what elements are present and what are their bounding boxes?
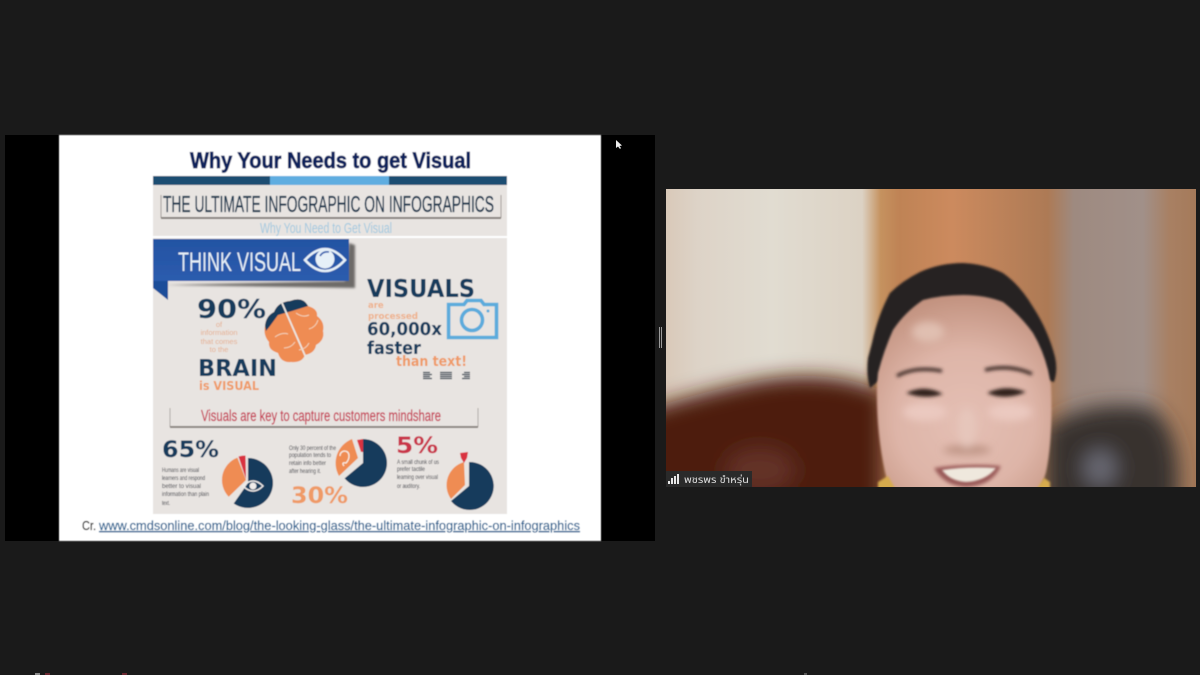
icon: text lines [423, 372, 470, 378]
source credit: www.cmdsonline.com/blog/the-looking-glass/the-ultimate-infographic-on-infographics [98, 518, 580, 533]
cropped toolbar specks at bottom edge [35, 673, 807, 675]
65 percent description [162, 467, 209, 507]
icon: ear on pie [340, 451, 349, 466]
information caption: of [216, 320, 223, 329]
panel resize handle [659, 327, 662, 348]
think visual ribbon [153, 239, 355, 300]
65 percent description: Humans are visual [162, 467, 199, 474]
white divider [153, 236, 507, 238]
think visual ribbon: THINK VISUAL [178, 247, 301, 277]
information caption: information [200, 328, 238, 337]
stat: visuals 60,000x [367, 274, 496, 378]
65 percent description: learners and respond [162, 475, 205, 482]
mouse cursor [616, 140, 622, 149]
icon: signal bars [668, 474, 679, 484]
pie chart: 5 percent [447, 452, 494, 510]
source credit: Cr. [82, 518, 96, 533]
section banner: customers mindshare [170, 408, 478, 428]
30 percent description: retain info better [289, 460, 327, 467]
90 percent figure: 90% [197, 295, 266, 325]
30 percent description [289, 445, 336, 475]
65 percent description: text. [162, 500, 170, 507]
are processed [368, 301, 418, 322]
60,000x figure: 60,000x [367, 319, 442, 340]
icon: camera [449, 300, 496, 338]
eyes [906, 388, 1026, 397]
blurred furniture [666, 359, 1192, 487]
are processed: processed [368, 312, 418, 322]
stat: 90 percent brain [197, 295, 323, 393]
tricolour header bar [153, 176, 507, 185]
5 percent description: A small chunk of us [397, 459, 440, 466]
infographic heading banner: THE ULTIMATE INFOGRAPHIC ON INFOGRAPHICS [163, 191, 494, 217]
participant name: พชรพร ขำหรุ่น [684, 473, 749, 486]
brain label: BRAIN [198, 356, 277, 382]
30 percent description: Only 30 percent of the [289, 445, 336, 452]
face shading [903, 322, 1032, 455]
65 percent description: information than plain [162, 491, 209, 498]
30 percent figure: 30% [291, 484, 348, 509]
section banner: customers mindshare: Visuals are key to capture customers mindshare [201, 408, 441, 425]
5 percent description: learning over visual [397, 474, 438, 481]
infographic background [153, 176, 507, 514]
is visual label: is VISUAL [199, 379, 259, 393]
stat: 30 percent [289, 439, 387, 509]
5 percent description: or auditory. [397, 483, 420, 490]
are processed: are [368, 301, 384, 311]
person [867, 263, 1056, 492]
30 percent description: population tends to [289, 452, 331, 459]
pie chart: 65 percent [222, 455, 273, 508]
infographic panel [153, 176, 507, 514]
slide [59, 135, 601, 541]
65 percent description: better to visual [162, 483, 202, 490]
hair [867, 263, 1056, 388]
blurred room background [666, 189, 1196, 487]
collar [876, 476, 1052, 487]
slide white background [59, 135, 601, 541]
infographic subtitle: Why You Need to Get Visual [260, 220, 392, 237]
5 percent description [397, 459, 440, 490]
5 percent figure: 5% [396, 434, 438, 459]
5 percent description: prefer tactile [397, 466, 425, 473]
video panel: participant [666, 189, 1196, 487]
shared screen: black slide frame [5, 135, 655, 541]
information caption [200, 320, 238, 354]
30 percent description: after hearing it. [289, 468, 321, 475]
mouth [934, 465, 1001, 487]
stat: 5 percent [396, 434, 494, 510]
name tag [666, 471, 752, 487]
than text: than text! [396, 354, 467, 370]
icon: eye on pie [243, 481, 263, 491]
65 percent figure: 65% [162, 438, 219, 463]
visuals heading: VISUALS [367, 274, 475, 303]
pie chart: 30 percent [336, 439, 387, 487]
infographic heading banner [161, 191, 501, 219]
eyebrows [897, 368, 1032, 376]
icon: brain [264, 299, 323, 362]
icon: eye [305, 249, 345, 271]
information caption: that comes [201, 337, 238, 346]
face [877, 295, 1051, 492]
faster: faster [367, 338, 421, 359]
stat: 65 percent [162, 438, 273, 508]
information caption: to the [210, 345, 228, 354]
slide title: Why Your Needs to get Visual [190, 148, 471, 173]
